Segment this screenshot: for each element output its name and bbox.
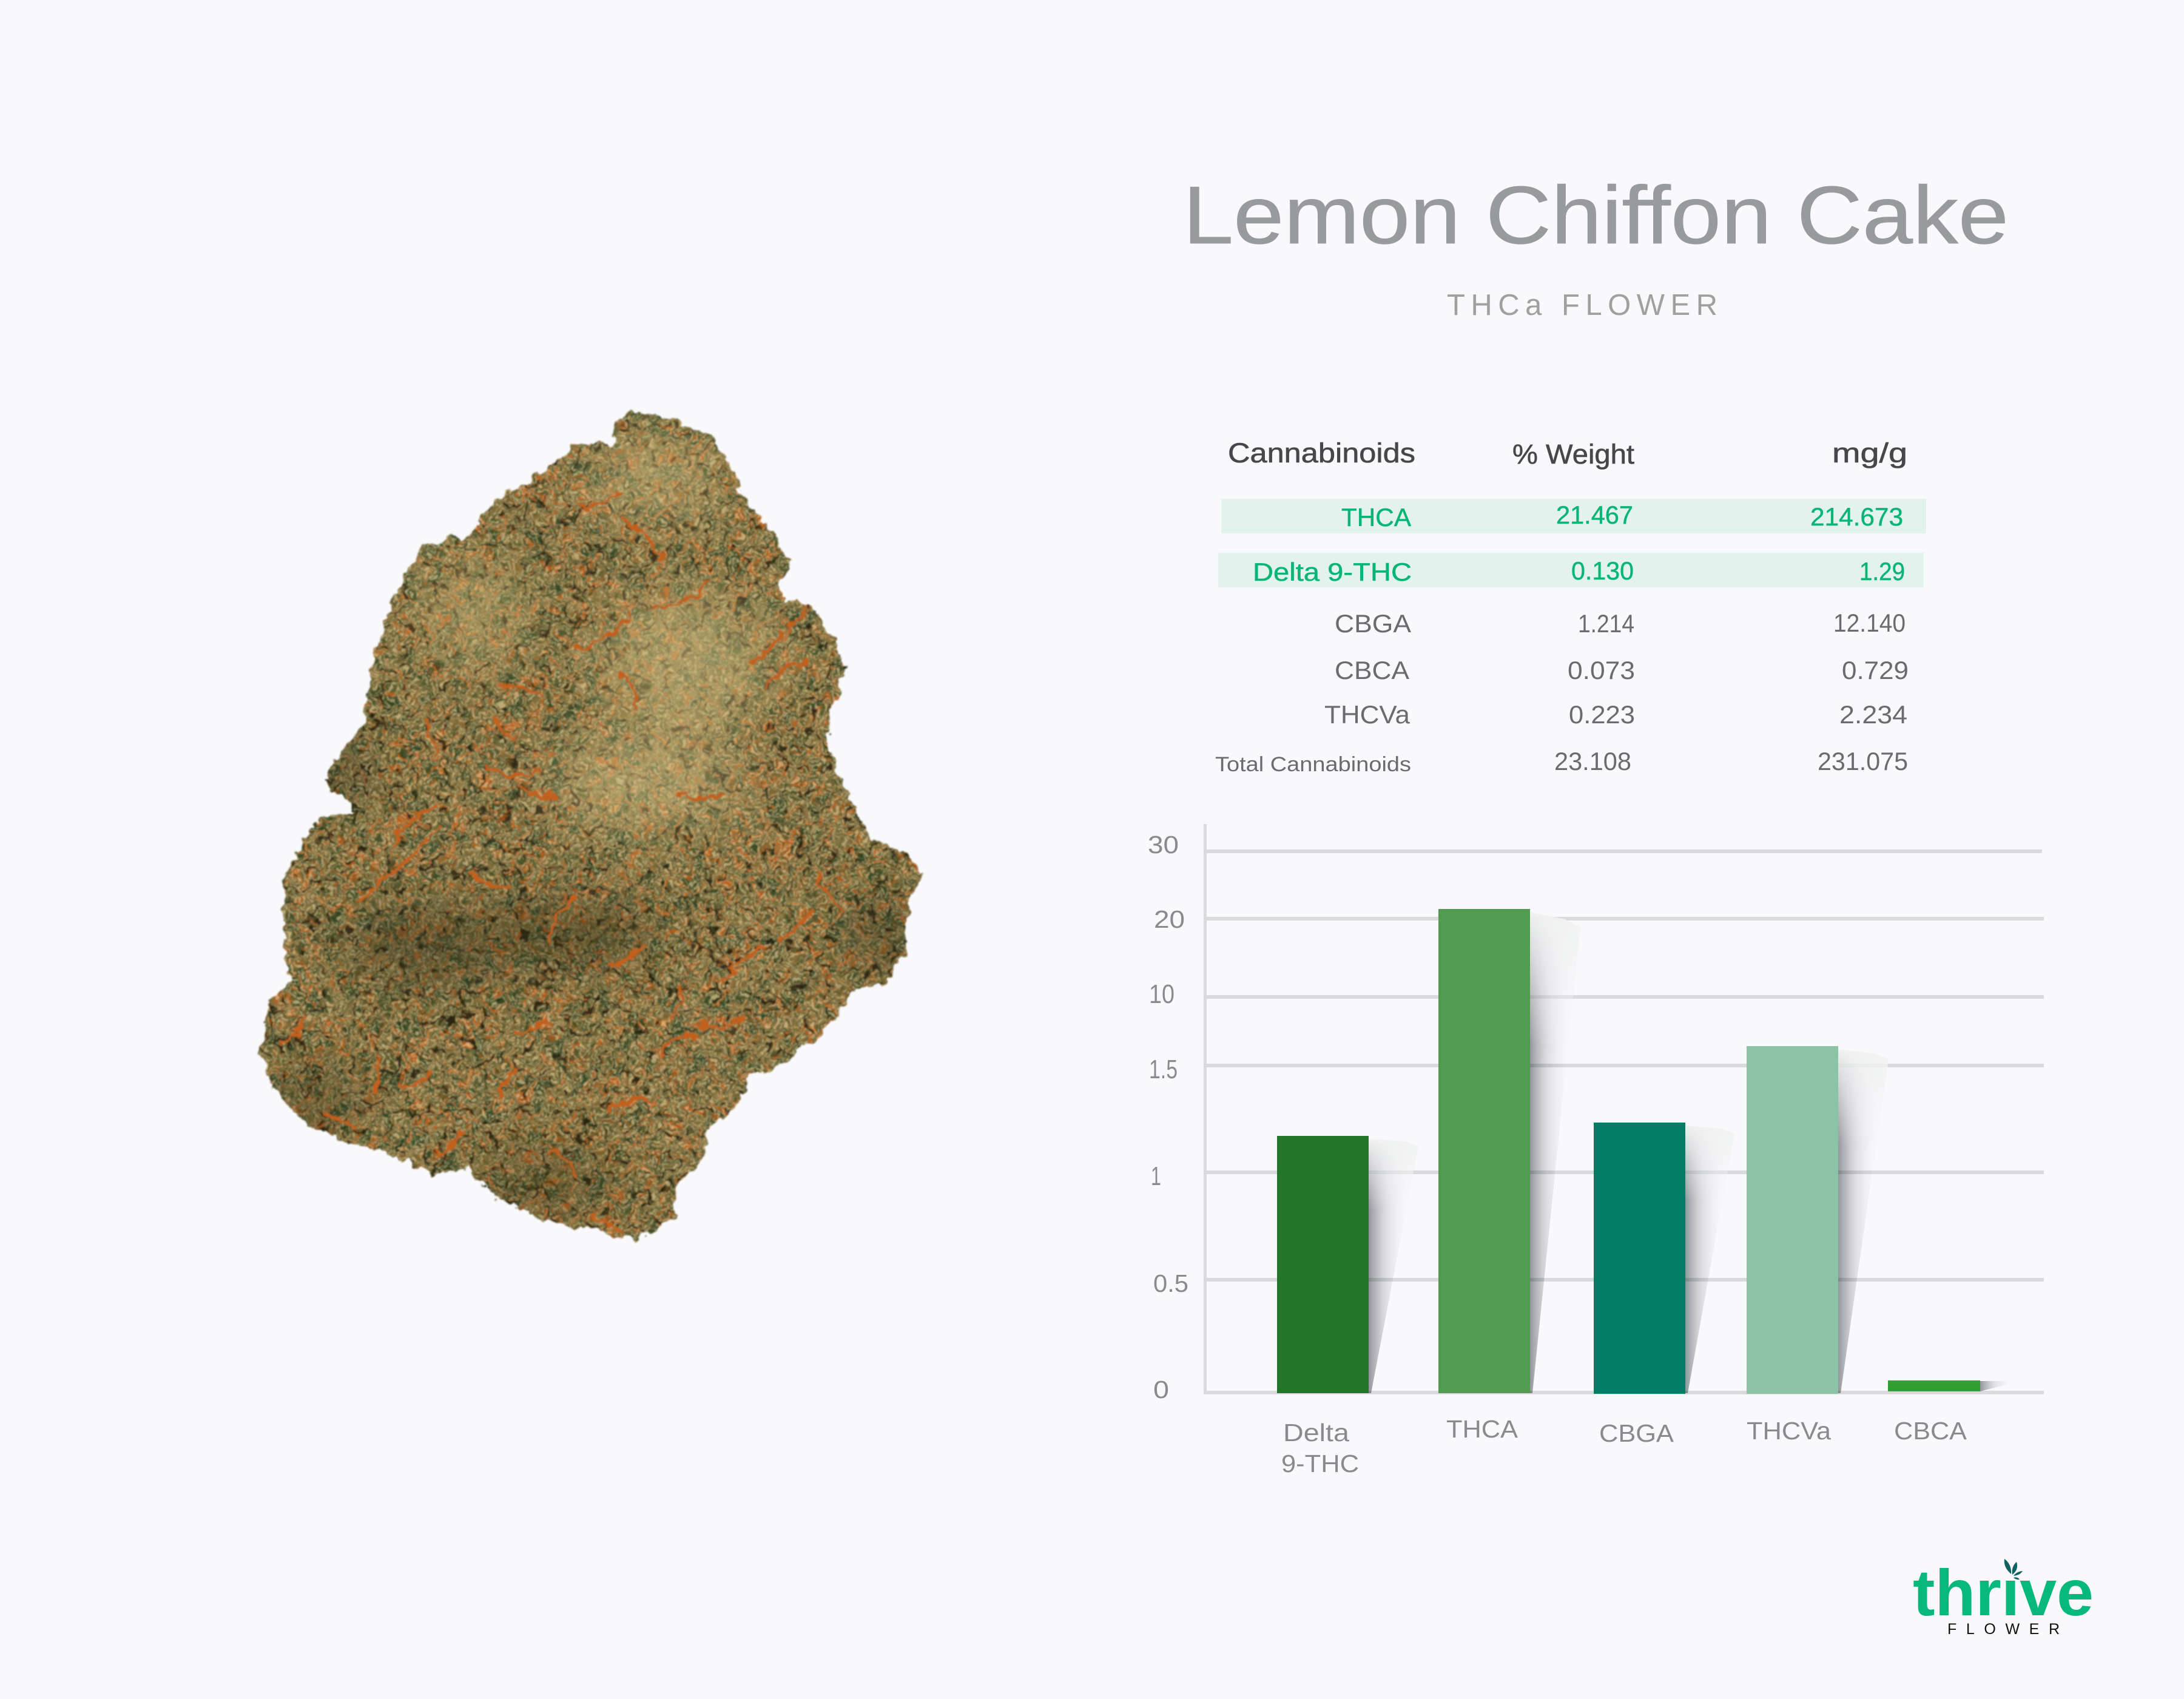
y axis labels: 20 [1154, 905, 1185, 933]
row: Delta 9-THC: 0.130 [1571, 556, 1634, 585]
row: Delta 9-THC: 1.29 [1859, 557, 1905, 586]
row: Total Cannabinoids [1215, 747, 1908, 776]
row: THCVa [1324, 700, 1907, 729]
row: Total Cannabinoids: Total Cannabinoids [1215, 753, 1411, 776]
row: THCA [1341, 501, 1903, 532]
row: CBCA: 0.073 [1568, 656, 1635, 684]
row: CBCA: CBCA [1335, 656, 1409, 684]
row: CBGA: 1.214 [1578, 609, 1634, 638]
row: Total Cannabinoids: 23.108 [1554, 747, 1631, 775]
y axis labels: 1.5 [1149, 1055, 1178, 1084]
table: cannabinoids [1215, 437, 1926, 776]
y axis labels: 0 [1153, 1376, 1169, 1403]
x axis labels: 9-THC [1281, 1450, 1359, 1478]
table header row [1228, 437, 1907, 470]
table highlight band: THCA [1221, 499, 1926, 533]
logo: thrive flower [1913, 1556, 2094, 1638]
x axis labels: CBCA [1894, 1417, 1967, 1445]
row: Delta 9-THC: Delta 9-THC [1253, 558, 1412, 586]
row: CBGA [1335, 609, 1906, 638]
bar shadows [1369, 912, 2020, 1393]
bar: CBGA [1594, 1123, 1685, 1394]
bar chart [1148, 824, 2044, 1478]
image: cannabis flower bud [256, 409, 925, 1244]
row: THCA: 214.673 [1810, 502, 1903, 531]
row: THCVa: 0.223 [1569, 700, 1635, 729]
i-dot cover [2005, 1557, 2018, 1581]
table header row: % Weight [1512, 439, 1635, 470]
title: Lemon Chiffon Cake [1183, 169, 2009, 261]
y axis labels: 1 [1151, 1161, 1161, 1191]
subtitle: THCa FLOWER [1447, 289, 1717, 322]
row: CBCA [1335, 656, 1909, 684]
row: CBCA: 0.729 [1842, 656, 1909, 684]
row: CBGA: 12.140 [1833, 609, 1906, 637]
row: THCA: 21.467 [1556, 501, 1633, 529]
table header row: mg/g [1832, 437, 1907, 468]
x axis labels: THCVa [1747, 1417, 1831, 1445]
row: Delta 9-THC [1253, 556, 1905, 586]
chart grid lines and axis [1204, 824, 2044, 1394]
y axis labels [1148, 831, 1188, 1403]
y axis labels: 10 [1149, 979, 1175, 1009]
x axis labels: THCA [1446, 1415, 1518, 1443]
bar: THCA [1438, 909, 1530, 1393]
icon: leaves [2004, 1559, 2023, 1579]
row: Total Cannabinoids: 231.075 [1818, 747, 1908, 775]
row: THCVa: THCVa [1324, 700, 1410, 729]
row: THCVa: 2.234 [1839, 700, 1907, 729]
y axis labels: 0.5 [1153, 1269, 1188, 1297]
x axis labels: Delta [1283, 1419, 1349, 1447]
bar: CBCA [1888, 1380, 1980, 1391]
logo wordmark: thrive [1913, 1556, 2094, 1629]
y axis labels: 30 [1148, 831, 1179, 859]
row: CBGA: CBGA [1335, 609, 1411, 638]
bar: Delta 9-THC [1277, 1136, 1369, 1393]
row: THCA: THCA [1341, 503, 1411, 532]
bar shadow highlights [1369, 912, 1889, 1393]
x axis labels [1281, 1415, 1967, 1478]
table header row: Cannabinoids [1228, 437, 1415, 468]
logo sub-word: FLOWER [1947, 1621, 2060, 1638]
table highlight band: Delta 9-THC [1218, 553, 1924, 587]
x axis labels: CBGA [1599, 1419, 1674, 1447]
bar: THCVa [1747, 1046, 1838, 1394]
